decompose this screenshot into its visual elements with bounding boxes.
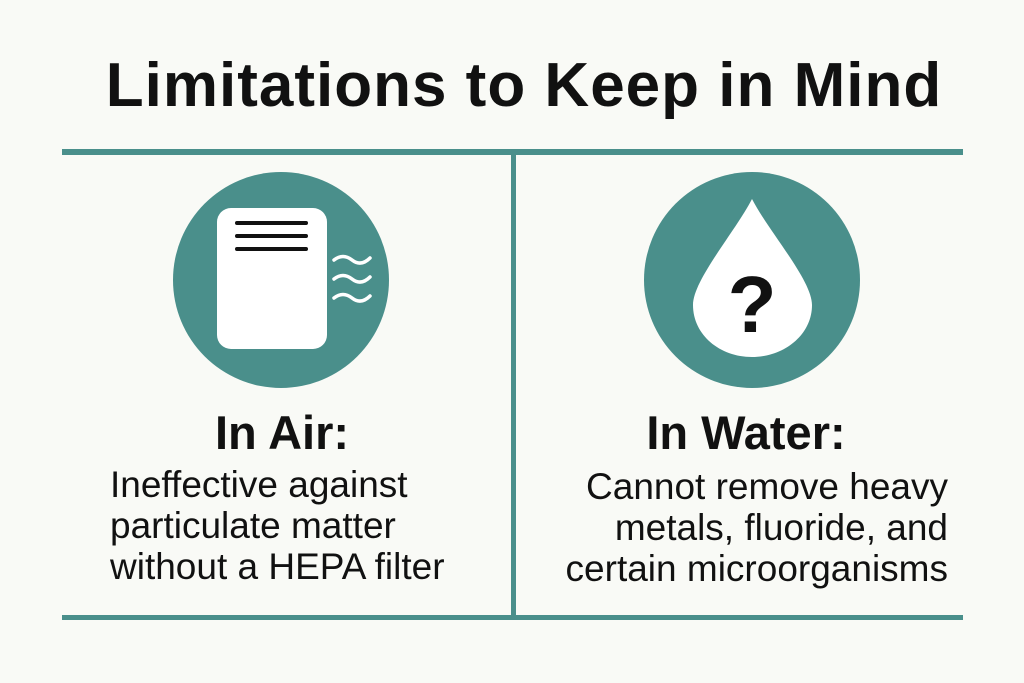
text: air limitation: Ineffective against: [110, 464, 408, 505]
heading: In Water: In Water:: [646, 406, 846, 459]
text: water limitation: [566, 466, 948, 589]
top rule: [62, 149, 963, 155]
title: Limitations to Keep in Mind: [106, 51, 942, 120]
center divider: [511, 152, 516, 618]
text: water limitation: metals, fluoride, and: [615, 507, 948, 548]
heading: In Air: In Air:: [215, 406, 349, 459]
text: air limitation: [110, 464, 445, 587]
text: air limitation: without a HEPA filter: [110, 546, 445, 587]
text: air limitation: particulate matter: [110, 505, 396, 546]
text: water limitation: Cannot remove heavy: [586, 466, 948, 507]
text: water limitation: certain microorganisms: [566, 548, 948, 589]
bottom rule: [62, 615, 963, 620]
icon: water drop with question mark: ?: [728, 260, 776, 349]
